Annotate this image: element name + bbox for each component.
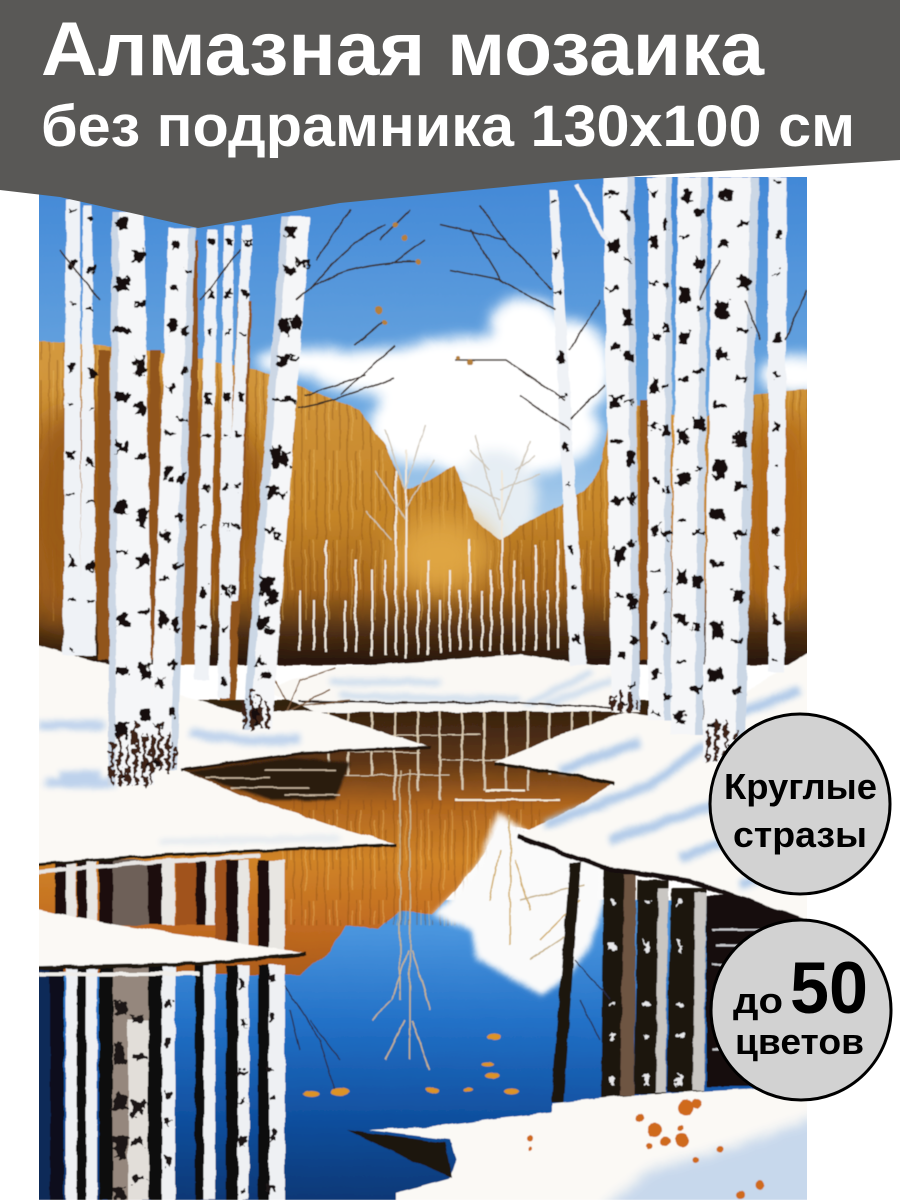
back bank shadows	[330, 672, 612, 705]
left shore pale strip	[39, 856, 260, 872]
left bank shadows	[39, 725, 340, 842]
white leaning branch	[577, 185, 606, 240]
orange reflection streaks	[280, 800, 540, 925]
right upper snow bank	[494, 652, 807, 919]
painting: birch forest by a winter stream	[20, 160, 850, 1200]
bark marks	[71, 180, 778, 780]
prefix: до	[733, 980, 783, 1021]
sky	[39, 177, 807, 523]
reflected cloud	[432, 812, 604, 996]
right shorelines	[518, 836, 800, 920]
left upper shoreline	[182, 747, 430, 770]
title line 1: Алмазная мозаика	[41, 7, 765, 92]
lower left shoreline	[20, 954, 306, 968]
floating leaves	[303, 1034, 519, 1097]
right bank shadows	[545, 690, 807, 885]
bottom bank dark edge	[347, 1130, 452, 1178]
reflected pale tree	[372, 770, 585, 1070]
number: 50	[790, 948, 868, 1029]
fallen orange leaves	[527, 1099, 765, 1199]
forest texture	[20, 340, 830, 620]
back bank ice line	[298, 701, 610, 708]
header banner	[0, 0, 900, 228]
water: orange reflection	[39, 698, 706, 976]
title line 2: без подрамника 130х100 см	[41, 94, 855, 159]
reflected trunks upper-left band	[55, 860, 285, 955]
bare bush on bank	[274, 666, 350, 711]
badge circle	[710, 714, 890, 894]
reflected fine branches	[285, 960, 610, 1090]
main left birches	[108, 212, 310, 785]
trunk shaded sides	[108, 177, 759, 785]
lower left snow	[39, 908, 304, 968]
water: blue lower part	[62, 899, 756, 1200]
right upper shoreline	[495, 764, 615, 784]
near-shore reflections	[300, 712, 590, 800]
back snow bank	[262, 654, 640, 712]
badge: up to 50 colours	[711, 920, 891, 1100]
main right birches	[603, 177, 759, 762]
trunk bases	[112, 690, 736, 785]
left shoreline	[20, 845, 396, 866]
forest tone patches	[20, 390, 818, 630]
banner shape	[0, 0, 900, 228]
thin background birches	[63, 177, 787, 698]
glint on water	[455, 790, 560, 800]
badge circle	[711, 920, 891, 1100]
pale centre tree crowns	[365, 425, 540, 540]
distant pale trunks	[300, 450, 570, 658]
badge text line 2: стразы	[733, 814, 867, 855]
brown back trunks	[98, 240, 648, 700]
light patches on bark reflection	[128, 1020, 148, 1200]
badge text line 1: Круглые	[724, 766, 877, 807]
badge: round rhinestones	[710, 714, 890, 894]
left snow bank	[20, 640, 430, 866]
reflected trunks right	[551, 862, 830, 1102]
bottom snow shadow	[590, 1112, 830, 1200]
lower left pale strip	[39, 972, 200, 976]
clouds	[255, 297, 830, 550]
dark streaky water near left bank	[185, 758, 350, 800]
autumn forest backdrop	[20, 340, 830, 665]
bare branches	[60, 205, 807, 430]
bottom snow bank	[369, 1085, 830, 1200]
autumn leaves on branches	[374, 222, 473, 365]
caption: цветов	[735, 1021, 864, 1062]
bark reflection marks	[120, 975, 272, 1200]
streak highlights	[205, 770, 340, 795]
birch trunks	[63, 177, 787, 785]
reflected bark highlights	[612, 900, 680, 1090]
reflected trunks lower-left band	[20, 965, 285, 1200]
